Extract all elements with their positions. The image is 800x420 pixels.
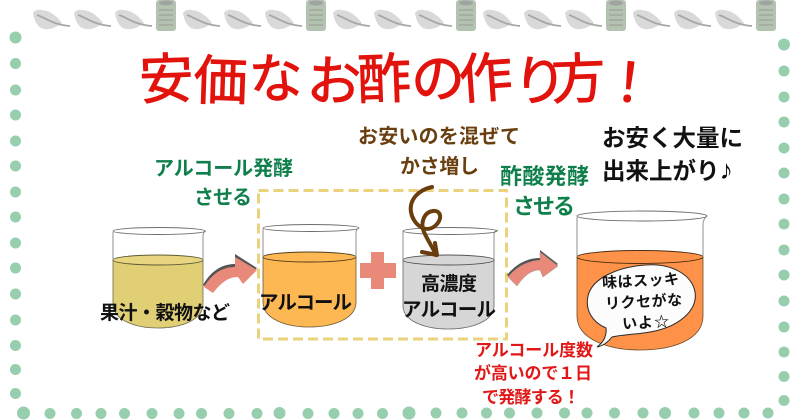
note: mixing cheap alcohol: お安いのを混ぜて (358, 125, 520, 148)
note: one-day fermentation: が高いので１日 (474, 363, 592, 383)
note: mixing cheap alcohol: かさ増し (400, 155, 479, 178)
label: alcohol fermentation: アルコール発酵 (154, 157, 293, 180)
top border: leaves and cans (33, 0, 776, 31)
label: alcohol fermentation: させる (194, 186, 252, 209)
speech bubble (587, 265, 695, 347)
heading: cheap mass production (602, 125, 743, 185)
bubble text: いよ☆ (622, 314, 670, 333)
beaker: alcohol (263, 224, 359, 327)
label: high-strength alcohol: 高濃度 (421, 273, 477, 295)
label: fruit juice and grain: 果汁・穀物など (100, 302, 230, 324)
arrow: acetic fermentation (507, 250, 558, 286)
label: acetic fermentation: させる (513, 194, 575, 219)
heading: cheap mass production: 出来上がり♪ (602, 155, 733, 185)
beaker: finished vinegar (577, 211, 707, 350)
beaker: high-strength alcohol (403, 228, 498, 329)
note: one-day fermentation (474, 341, 593, 407)
swirl arrow (411, 187, 440, 255)
heading: cheap mass production: お安く大量に (602, 125, 743, 151)
note: mixing cheap alcohol (358, 125, 520, 178)
note: one-day fermentation: アルコール度数 (475, 341, 593, 360)
note: one-day fermentation: で発酵する！ (482, 388, 580, 407)
arrow: fermentation to alcohol (203, 254, 257, 293)
label: acetic fermentation: 酢酸発酵 (500, 164, 589, 189)
bubble text: リクセがな (605, 291, 683, 313)
label: high-strength alcohol: アルコール (402, 299, 496, 321)
plus sign (360, 252, 396, 289)
bubble text (602, 271, 684, 334)
label: acetic fermentation (500, 164, 589, 219)
beaker: fruit juice and grain (113, 228, 206, 328)
dashed box (258, 190, 506, 339)
bubble text: 味はスッキ (602, 271, 679, 292)
label: alcohol: アルコール (259, 292, 352, 314)
label: high-strength alcohol (402, 273, 496, 321)
title: 安価なお酢の作り方！ (138, 47, 659, 117)
label: alcohol fermentation (154, 157, 293, 209)
